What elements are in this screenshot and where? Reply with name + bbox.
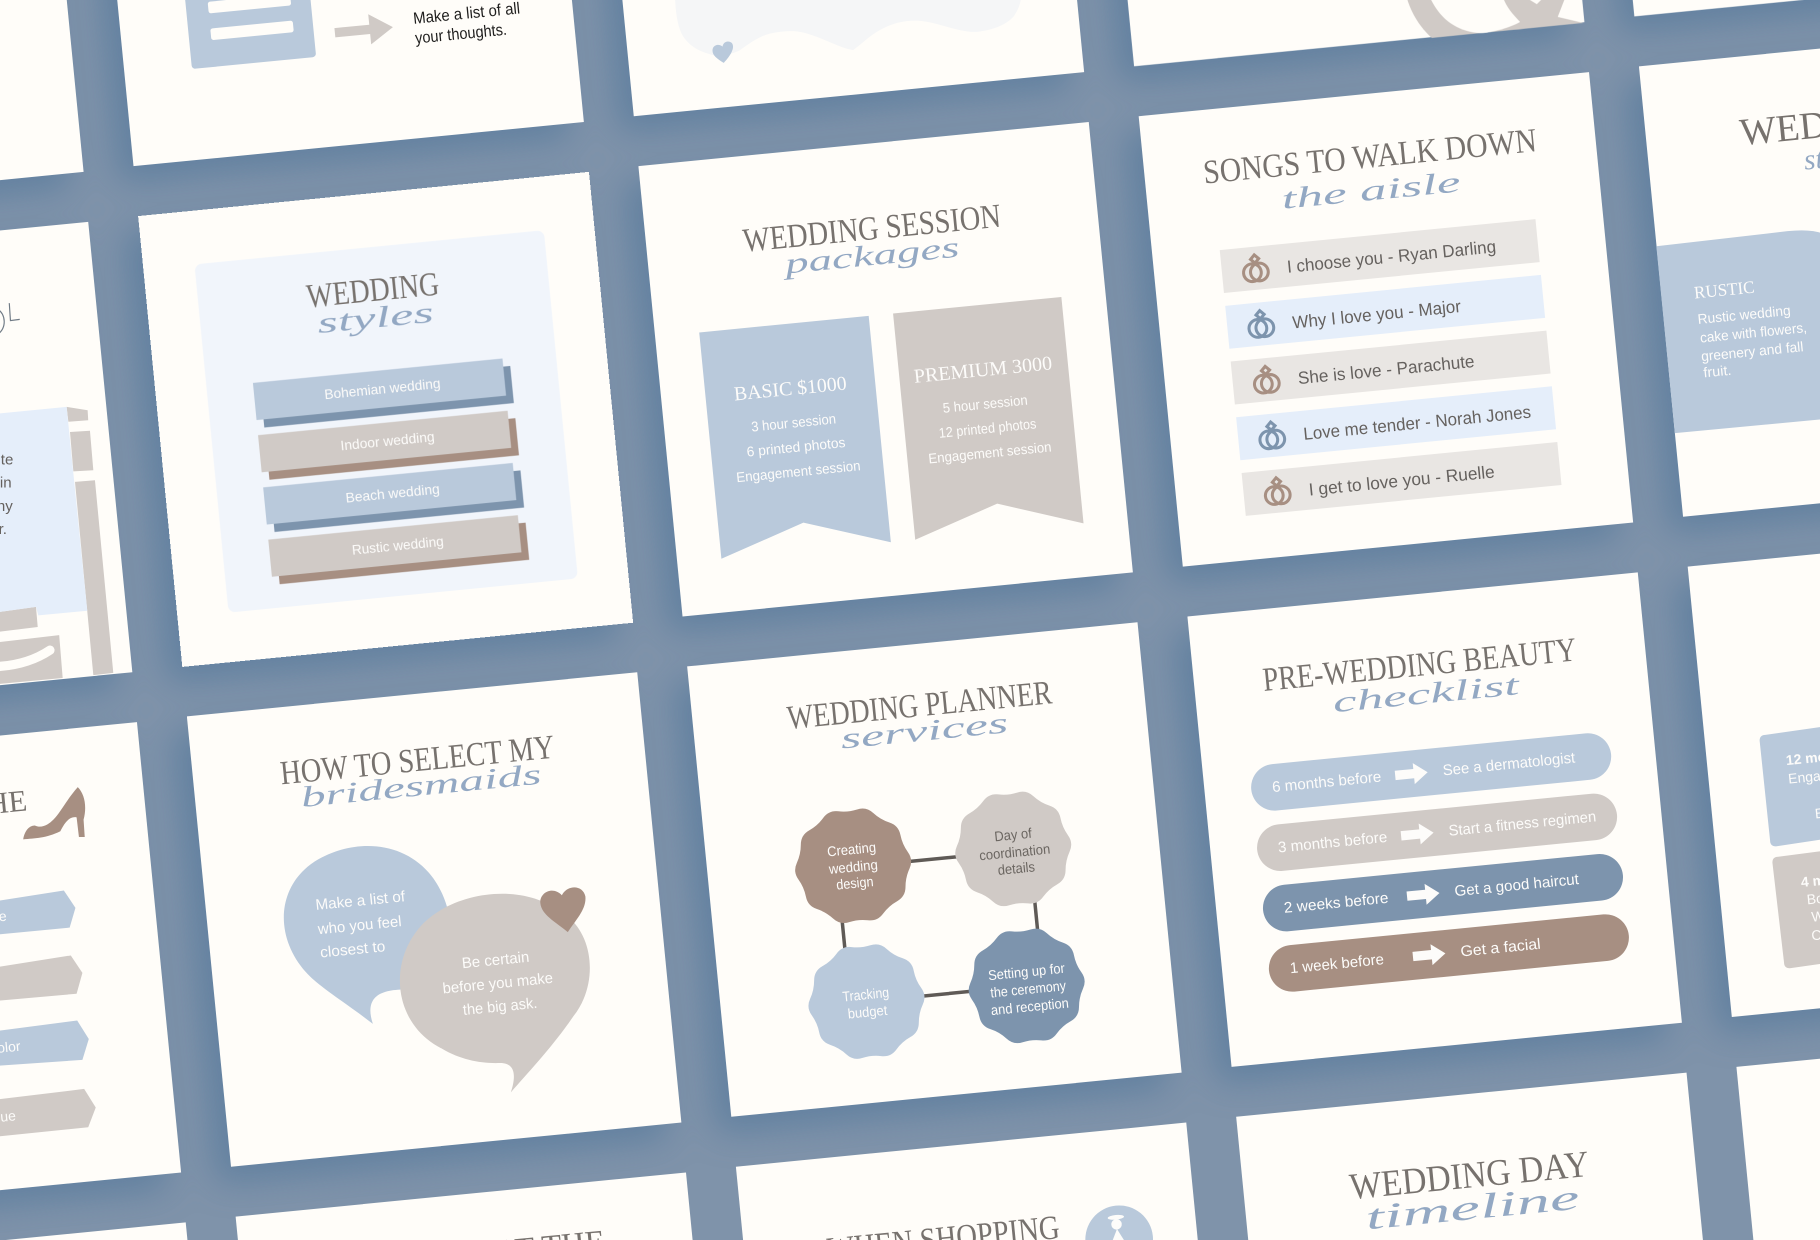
- speech bubble: taupe: Be certain: [461, 949, 530, 972]
- panel: light blue: [194, 230, 578, 613]
- light panel: [0, 407, 87, 615]
- service: day of coordination details: [950, 787, 1077, 910]
- song rows: She is love - Parachute: [1297, 351, 1475, 388]
- text: rustic: cake with flowers,: [1699, 319, 1808, 346]
- ring graphic: [1407, 0, 1583, 38]
- ribbon: basic: BASIC $1000: [733, 373, 848, 405]
- card: rustic (right): [1639, 22, 1820, 517]
- song rows: I get to love you - Ruelle: [1308, 461, 1496, 500]
- ribbon: basic: Engagement session: [735, 457, 861, 485]
- heading: WEDDING SESSION: [741, 198, 1003, 260]
- script heading: bridesmaids: [299, 759, 543, 814]
- text: make a list: [412, 0, 523, 48]
- text: rustic: greenery and fall: [1700, 338, 1804, 364]
- text: rustic: fruit.: [1703, 362, 1732, 380]
- ribbon: premium: [893, 297, 1084, 540]
- text fragments: te: [1, 451, 13, 468]
- card: shoes (left): [0, 722, 181, 1217]
- icon: list document: [181, 0, 316, 69]
- card: beauty checklist: [1187, 572, 1682, 1067]
- pill: 6 months: [1249, 731, 1613, 813]
- card: top-right partial: [1590, 0, 1820, 16]
- script heading: packages: [780, 232, 961, 281]
- tag: blue: [0, 890, 75, 935]
- card: planner services: [687, 622, 1182, 1117]
- script heading: services: [839, 707, 1009, 756]
- cloud shape: [675, 0, 1021, 55]
- service: tracking budget: budget: [847, 1002, 888, 1022]
- speech bubble: taupe: before you make: [442, 970, 554, 998]
- pill: 2 weeks: Get a good haircut: [1454, 871, 1580, 900]
- pill: 1 week: 1 week before: [1289, 951, 1385, 977]
- style bars: Beach wedding: [345, 481, 440, 506]
- connector square: [837, 850, 1043, 1003]
- heading: WEDDING PLANNER: [785, 674, 1054, 737]
- block: 12 months: [1760, 727, 1820, 846]
- service: creating wedding design: Creating: [826, 839, 877, 860]
- arrow: [333, 12, 394, 48]
- script heading: styles: [316, 297, 435, 340]
- pill: 3 months: [1255, 791, 1619, 873]
- card: songs: [1139, 72, 1633, 567]
- pill: 2 weeks: 2 weeks before: [1283, 890, 1389, 917]
- card: wedding day timeline: [1236, 1073, 1731, 1240]
- service: creating wedding design: wedding: [827, 856, 878, 877]
- pill: 1 week: [1267, 912, 1631, 994]
- text: rustic: RUSTIC: [1693, 277, 1755, 302]
- speech bubble: taupe: [392, 885, 602, 1102]
- pill: 3 months: 3 months before: [1277, 829, 1388, 856]
- heading: PRE-WEDDING BEAUTY: [1261, 631, 1578, 699]
- block: 4 months: [1772, 851, 1820, 968]
- service: creating wedding design: [790, 804, 917, 927]
- ribbon: basic: [699, 316, 891, 559]
- icon: high heel shoe: [23, 787, 85, 839]
- tag: taupe value: ue: [0, 1107, 17, 1125]
- tag: taupe: [0, 955, 82, 1001]
- pill: 6 months: 6 months before: [1271, 769, 1382, 796]
- text fragments: [0, 451, 13, 538]
- card: bridesmaids: [187, 672, 681, 1167]
- card: wedding styles: [138, 172, 633, 666]
- speech bubble: blue: who you feel: [316, 913, 402, 938]
- speech bubble: taupe: the big ask.: [462, 995, 538, 1019]
- pill: 2 weeks: [1261, 852, 1625, 933]
- icon: heart: [713, 42, 733, 63]
- script heading: timeline: [1364, 1178, 1581, 1237]
- song rows: Why I love you - Major: [1291, 296, 1462, 332]
- card: bottom row, the: [236, 1172, 730, 1240]
- text: make a list: your thoughts.: [414, 21, 508, 48]
- text: rustic: Rustic wedding: [1697, 302, 1791, 327]
- script fragment: [0, 303, 20, 334]
- card: cloud (top row): [590, 0, 1084, 116]
- heading: SONGS TO WALK DOWN: [1202, 122, 1538, 192]
- tag: taupe value: [0, 1089, 96, 1137]
- service: setting up: and reception: [990, 995, 1069, 1018]
- pill: 1 week: Get a facial: [1460, 936, 1541, 960]
- service: setting up: Setting up for: [987, 960, 1066, 983]
- heading: WEDDING: [305, 265, 441, 315]
- style bars: [253, 358, 529, 585]
- ribbon: premium: 12 printed photos: [938, 415, 1037, 441]
- service: creating wedding design: design: [835, 873, 874, 893]
- heading: HOW TO SELECT MY: [279, 729, 556, 792]
- heading: WEDDING DAY: [1348, 1144, 1591, 1208]
- tag: blue color: [0, 1020, 89, 1066]
- service: setting up: [963, 924, 1090, 1047]
- service: day of coordination details: Day of: [994, 825, 1032, 844]
- curve on cake: [0, 650, 50, 666]
- script heading: checklist: [1331, 669, 1522, 719]
- service: setting up: the ceremony: [990, 977, 1067, 1001]
- pill: 6 months: See a dermatologist: [1442, 749, 1577, 779]
- song rows: Love me tender - Norah Jones: [1302, 402, 1532, 444]
- ribbon: premium: 5 hour session: [942, 392, 1028, 416]
- script heading: the aisle: [1280, 166, 1462, 216]
- panel: rustic: [1656, 230, 1820, 433]
- card: wedding session packages: [638, 122, 1133, 617]
- taupe stripes: [0, 407, 113, 684]
- style bars: Indoor wedding: [340, 428, 435, 453]
- icon: heart: [539, 886, 589, 935]
- card: make a list (top row): [89, 0, 584, 166]
- style bars: Bohemian wedding: [324, 375, 441, 402]
- ribbon: premium: Engagement session: [928, 438, 1052, 466]
- song rows: [1220, 219, 1562, 516]
- speech bubble: blue: [277, 838, 458, 1032]
- song rows: I choose you - Ryan Darling: [1286, 236, 1497, 277]
- card: when shopping: [736, 1123, 1230, 1240]
- speech bubble: blue: closest to: [319, 938, 386, 962]
- style bars: Rustic wedding: [351, 533, 444, 558]
- ribbon: basic: 3 hour session: [750, 410, 837, 435]
- icon: bride figure: [1082, 1202, 1156, 1240]
- service: tracking budget: Tracking: [842, 984, 890, 1005]
- text: rustic: [1693, 277, 1808, 380]
- service: tracking budget: [803, 940, 930, 1063]
- card: ring shape (top row): [1090, 0, 1584, 66]
- card: left partial with cake: [0, 222, 132, 716]
- service: day of coordination details: details: [997, 858, 1036, 878]
- text fragments: in: [0, 475, 12, 492]
- ribbon: basic: 6 printed photos: [746, 434, 846, 460]
- pill: 3 months: Start a fitness regimen: [1448, 808, 1597, 840]
- ribbon: premium: PREMIUM 3000: [913, 352, 1053, 388]
- card: bottom-left partial: [0, 1222, 230, 1240]
- card: timeline blocks (right): [1688, 522, 1820, 1017]
- card: top-left partial: [0, 0, 84, 216]
- card: bottom-right partial: [1736, 1023, 1820, 1240]
- speech bubble: blue: Make a list of: [315, 888, 407, 914]
- service: day of coordination details: coordination: [979, 841, 1051, 863]
